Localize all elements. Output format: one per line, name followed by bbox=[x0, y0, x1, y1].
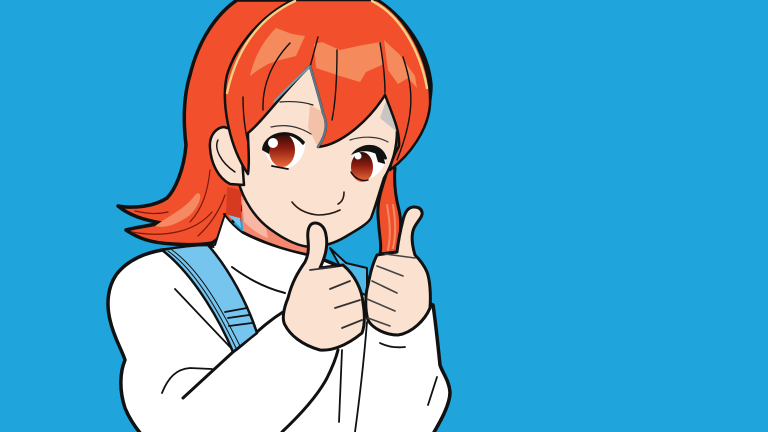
face bbox=[238, 65, 397, 247]
right thumbs-up hand bbox=[366, 207, 430, 335]
smiling mouth bbox=[292, 192, 344, 215]
ear bbox=[210, 127, 244, 185]
left blue backpack strap with buckle bbox=[162, 245, 257, 352]
left eye bbox=[262, 126, 311, 169]
back hair and left flip bbox=[118, 0, 431, 245]
right eye bbox=[350, 137, 388, 182]
left thumbs-up hand bbox=[283, 223, 364, 350]
back hair strand on right bbox=[378, 168, 401, 254]
white sweater body bbox=[108, 246, 450, 432]
turtleneck collar bbox=[214, 214, 320, 294]
right blue strap bbox=[330, 248, 367, 296]
hair highlights bbox=[250, 28, 417, 88]
neck bbox=[241, 196, 325, 254]
front hair with bangs bbox=[225, 0, 430, 174]
